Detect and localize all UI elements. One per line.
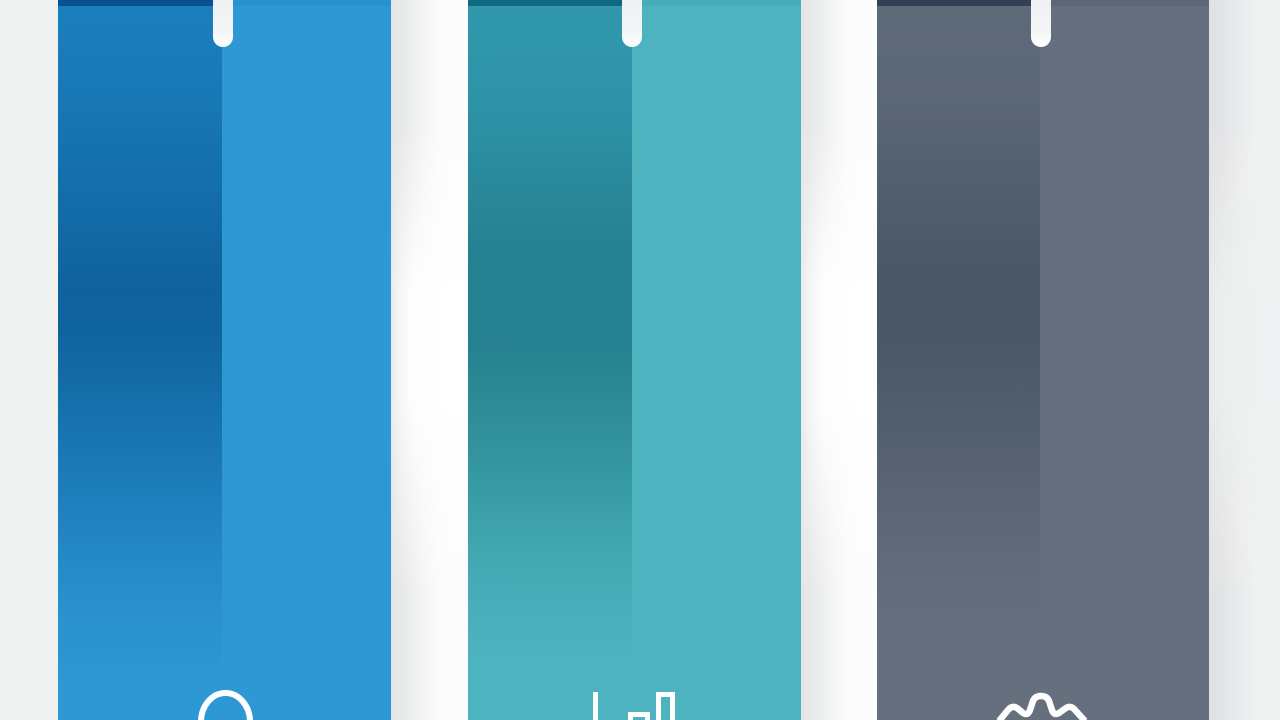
panel: blue column (58, 0, 391, 720)
teal column white tab (622, 0, 642, 47)
icon: bar chart (593, 692, 675, 720)
teal column top strip (468, 0, 801, 6)
blue column darker left half (58, 0, 222, 720)
gray column top strip (877, 0, 1209, 6)
teal column darker left half (468, 0, 632, 720)
gray column white tab (1031, 0, 1051, 47)
icon: gear (996, 692, 1088, 720)
blue column top strip (58, 0, 391, 6)
panel: gray column (877, 0, 1209, 720)
icon: light bulb (198, 690, 253, 720)
blue column white tab (213, 0, 233, 47)
gray column darker left half (877, 0, 1040, 720)
panel: teal column (468, 0, 801, 720)
